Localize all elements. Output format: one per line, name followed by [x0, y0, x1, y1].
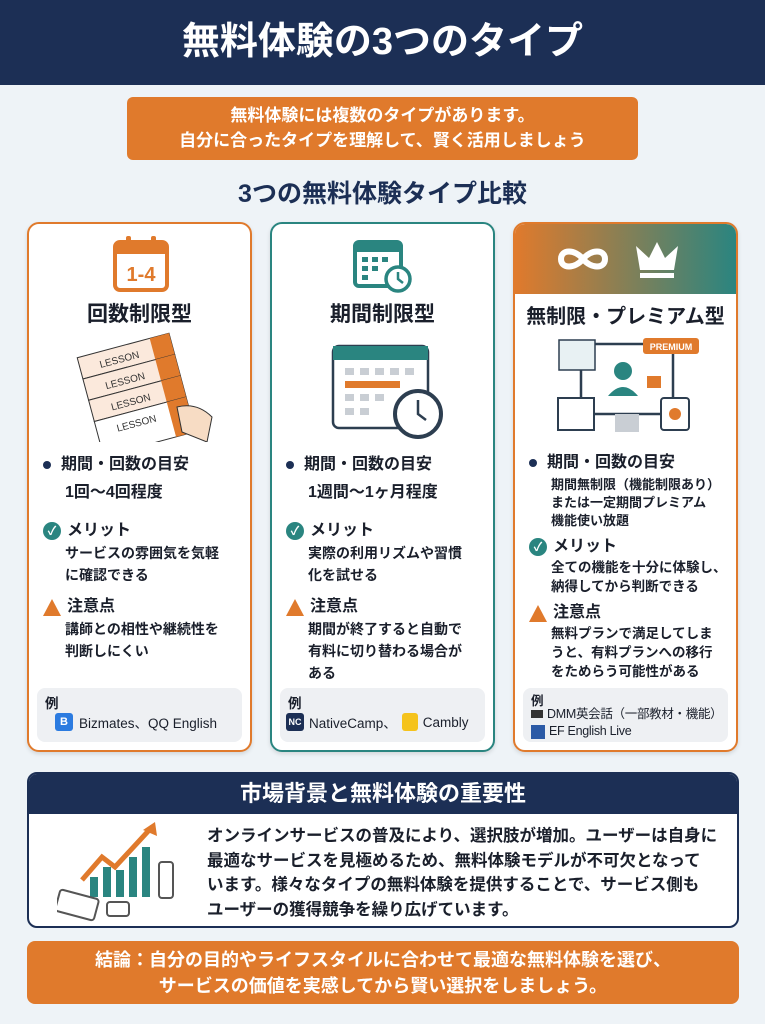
- examples: 例: [288, 696, 302, 711]
- section: guideline: 1週間〜1ヶ月程度: [308, 484, 438, 501]
- body text: [207, 826, 717, 918]
- section heading: [29, 774, 737, 814]
- examples: 例: [45, 696, 58, 711]
- card title: 無制限・プレミアム型: [526, 306, 725, 328]
- section: caution: [529, 603, 713, 679]
- illustration: growth chart: [57, 822, 174, 922]
- section: guideline: [286, 455, 438, 501]
- section: merit: メリット: [310, 522, 374, 539]
- examples: [523, 688, 728, 742]
- section: caution: ある: [308, 665, 336, 681]
- illustration: calendar and clock: [332, 344, 443, 439]
- examples: DMM英会話（一部教材・機能）: [547, 707, 722, 721]
- section: caution: [286, 597, 462, 681]
- section: caution: 判断しにくい: [65, 643, 149, 659]
- body text: います。様々なタイプの無料体験を提供することで、サービス側も: [207, 876, 699, 894]
- body text: ユーザーの獲得競争を繰り広げています。: [207, 900, 519, 918]
- subtitle: 3つの無料体験タイプ比較: [238, 180, 527, 208]
- section: guideline: または一定期間プレミアム: [551, 495, 706, 510]
- section: merit: 化を試せる: [308, 567, 378, 583]
- icon: infinity and crown: [558, 242, 678, 278]
- examples: 例: [531, 694, 544, 708]
- section: merit: [286, 522, 462, 583]
- section: caution: 無料プランで満足してしま: [551, 626, 713, 641]
- conclusion banner: [27, 941, 739, 1004]
- intro callout: 無料体験には複数のタイプがあります。: [230, 106, 535, 125]
- section: merit: ✓: [291, 524, 299, 538]
- panel: card 1: [27, 222, 252, 752]
- examples: NativeCamp、 Cambly: [309, 714, 469, 731]
- section: merit: ✓: [48, 524, 56, 538]
- section: caution: うと、有料プランへの移行: [551, 645, 712, 660]
- section: caution: 期間が終了すると自動で: [308, 621, 462, 637]
- conclusion banner: 結論：自分の目的やライフスタイルに合わせて最適な無料体験を選び、: [95, 950, 671, 970]
- examples: [280, 688, 485, 742]
- body text: 最適なサービスを見極めるため、無料体験モデルが不可欠となって: [207, 852, 701, 870]
- section: merit: メリット: [553, 538, 617, 555]
- section: merit: メリット: [67, 522, 131, 539]
- illustration: tickets: LESSON: [104, 371, 146, 392]
- section: merit: 納得してから判断できる: [551, 579, 699, 594]
- panel: card 3: [513, 222, 738, 752]
- panel: market background: [27, 772, 739, 928]
- section: guideline: [43, 455, 189, 501]
- illustration: tickets: LESSON: [110, 392, 152, 413]
- intro callout: [127, 97, 638, 160]
- examples: B: [60, 716, 68, 728]
- conclusion banner: サービスの価値を実感してから賢い選択をしましょう。: [159, 976, 607, 996]
- section: merit: [43, 522, 219, 583]
- section: merit: 全ての機能を十分に体験し、: [551, 560, 726, 575]
- icon: calendar clock: [353, 240, 412, 293]
- section: caution: 注意点: [553, 604, 601, 621]
- section: guideline: 機能使い放題: [551, 513, 629, 528]
- examples: NC: [288, 717, 302, 727]
- intro callout: 自分に合ったタイプを理解して、賢く活用しましょう: [179, 131, 586, 150]
- section: guideline: 期間・回数の目安: [304, 456, 432, 473]
- card title: 期間制限型: [330, 303, 435, 326]
- examples: Bizmates、QQ English: [79, 716, 217, 731]
- section: guideline: 期間・回数の目安: [61, 456, 189, 473]
- section: guideline: 1回〜4回程度: [65, 484, 163, 501]
- section: merit: サービスの雰囲気を気軽: [65, 545, 219, 561]
- section: guideline: 期間・回数の目安: [547, 454, 675, 471]
- section: caution: 注意点: [310, 598, 358, 615]
- header bar: [0, 0, 765, 85]
- card header gradient with icons: [515, 224, 736, 294]
- panel: card 2: [270, 222, 495, 752]
- illustration: tickets: [76, 332, 212, 442]
- illustration: tickets: LESSON: [99, 350, 141, 371]
- illustration: devices premium: [557, 338, 699, 432]
- illustration: devices premium: PREMIUM: [650, 342, 692, 352]
- section: merit: ✓: [534, 540, 542, 554]
- illustration: tickets: LESSON: [116, 414, 158, 435]
- icon: calendar 1-4: [113, 236, 169, 292]
- card title: 回数制限型: [87, 303, 192, 326]
- section: caution: 注意点: [67, 598, 115, 615]
- section: caution: [43, 597, 219, 659]
- section: guideline: 期間無制限（機能制限あり）: [551, 477, 720, 492]
- section: merit: 実際の利用リズムや習慣: [308, 545, 462, 561]
- examples: [37, 688, 242, 742]
- section: guideline: [529, 453, 720, 528]
- section: caution: をためらう可能性がある: [551, 664, 700, 679]
- section: caution: 講師との相性や継続性を: [65, 621, 219, 637]
- section: caution: 有料に切り替わる場合が: [308, 643, 462, 659]
- examples: EF English Live: [549, 724, 631, 738]
- section heading: 市場背景と無料体験の重要性: [240, 781, 526, 806]
- section: merit: に確認できる: [65, 567, 149, 583]
- body text: オンラインサービスの普及により、選択肢が増加。ユーザーは自身に: [207, 827, 717, 845]
- section: merit: [529, 538, 726, 594]
- icon: calendar 1-4: 1-4: [127, 264, 156, 286]
- header bar: 無料体験の3つのタイプ: [182, 21, 583, 63]
